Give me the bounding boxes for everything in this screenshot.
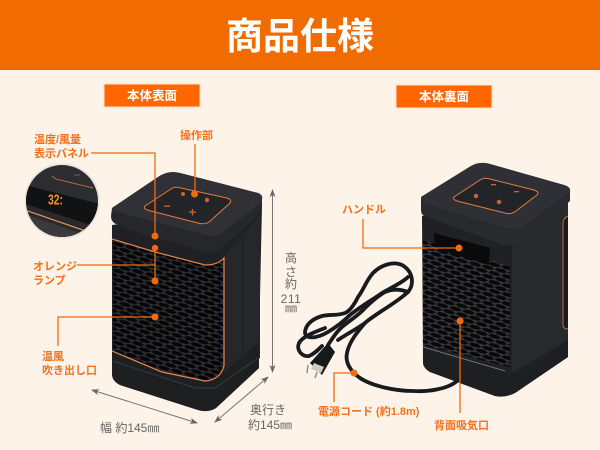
back heater side lamp [563,216,568,329]
label: orange lamp: オレンジ [33,260,77,273]
heading: back side: 本体裏面 [419,89,469,104]
label: temperature and airflow display panel: 温度/風量 [34,132,81,146]
label: controls: 操作部 [180,128,213,142]
front heater orange lamp [112,239,224,381]
label: orange lamp: ランプ [33,274,66,287]
dimension: width [92,390,197,435]
dimension: height: ㎜ [285,301,297,315]
label: warm air outlet: 温風 [42,349,64,363]
dimension: height: 約 [285,276,297,291]
front heater top cap [111,172,262,252]
dimension: depth: 奥行き [250,403,286,417]
label: orange lamp [33,245,158,287]
front heater mesh grille [113,239,223,380]
label: handle: ハンドル [342,204,386,216]
inset: display panel close-up [25,164,100,240]
heading: front side: 本体表面 [127,88,177,103]
heading: front side [104,84,200,107]
label: power cord [318,370,420,418]
label: rear air intake [434,318,489,432]
power plug [307,343,335,378]
dimension: height: さ [285,265,297,279]
back heater control panel [453,178,538,214]
back heater [421,163,570,397]
label: warm air outlet [42,314,158,377]
front heater control panel [144,187,231,224]
dimension: width: 幅 約145㎜ [100,420,159,435]
front heater side face [224,215,260,382]
label: controls [180,128,213,198]
front heater [111,172,262,411]
back heater handle slot [434,233,490,265]
front heater base [112,342,259,411]
back heater side face [512,204,568,373]
display digits: 32: [48,192,63,208]
power cord [298,263,457,391]
back control icons [474,184,519,204]
title banner [0,0,600,70]
label: handle [342,204,462,252]
back heater base [423,340,568,397]
label: temperature and airflow display panel: 表示パネル [34,146,89,160]
label: rear air intake: 背面吸気口 [434,418,489,432]
back heater mesh grille [423,240,510,367]
dimension: height [272,190,301,372]
label: warm air outlet: 吹き出し口 [42,363,97,377]
front heater body [112,205,262,411]
dimension: depth: 約145㎜ [248,417,292,432]
label: power cord: 電源コード (約1.8m) [318,404,420,418]
back heater body [422,200,568,397]
back heater top cap [421,163,570,246]
dimension: height: 高 [285,251,297,265]
title banner: 商品仕様 [226,16,374,57]
label: temperature and airflow display panel [34,132,158,240]
dimension: depth [215,377,292,432]
front control icons [164,192,209,216]
dimension: height: 211 [281,292,301,306]
heading: back side [396,85,492,108]
